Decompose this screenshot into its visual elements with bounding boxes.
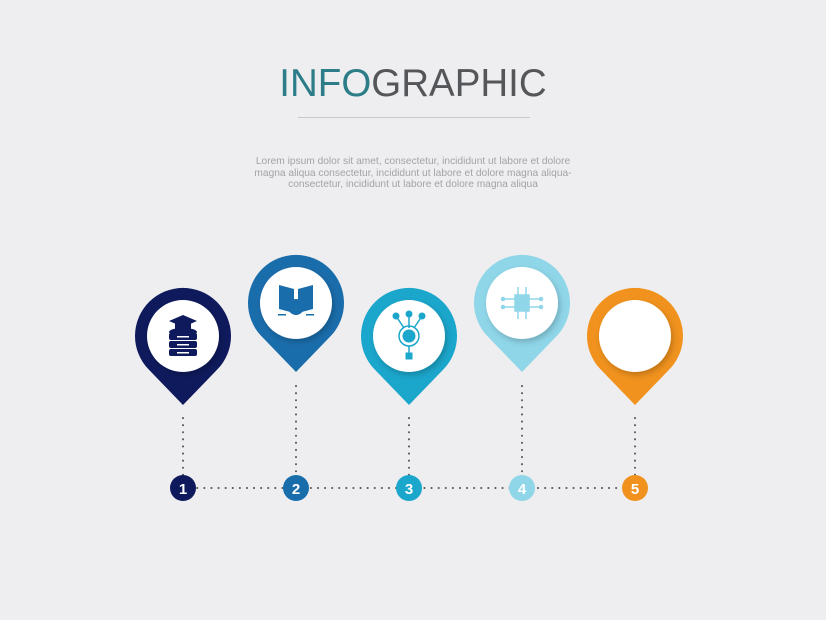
pin 2 [248, 255, 344, 372]
number markers: 2 [292, 481, 300, 498]
number markers: 5 [631, 481, 639, 498]
pin 1 [135, 288, 231, 405]
icon: database with graduation cap [169, 315, 197, 356]
pin 5 [587, 288, 683, 405]
pin 4 [474, 255, 570, 372]
number markers: 3 [405, 481, 413, 498]
number markers: 4 [518, 481, 527, 498]
number markers [170, 475, 648, 501]
pin 3 [361, 288, 457, 405]
number markers: 1 [179, 481, 187, 498]
icon: gear network [393, 311, 425, 359]
icon: book with brain [278, 285, 314, 316]
description text: Lorem ipsum dolor sit amet, consectetur, incididunt ut labore et dolore magna aliqua consectetur, incididunt ut labore et dolore magna aliqua-consectetur, incididunt ut labore et dolore magna aliqua [254, 156, 572, 190]
title: INFOGRAPHIC [279, 62, 547, 105]
icon: chip network [502, 287, 542, 319]
